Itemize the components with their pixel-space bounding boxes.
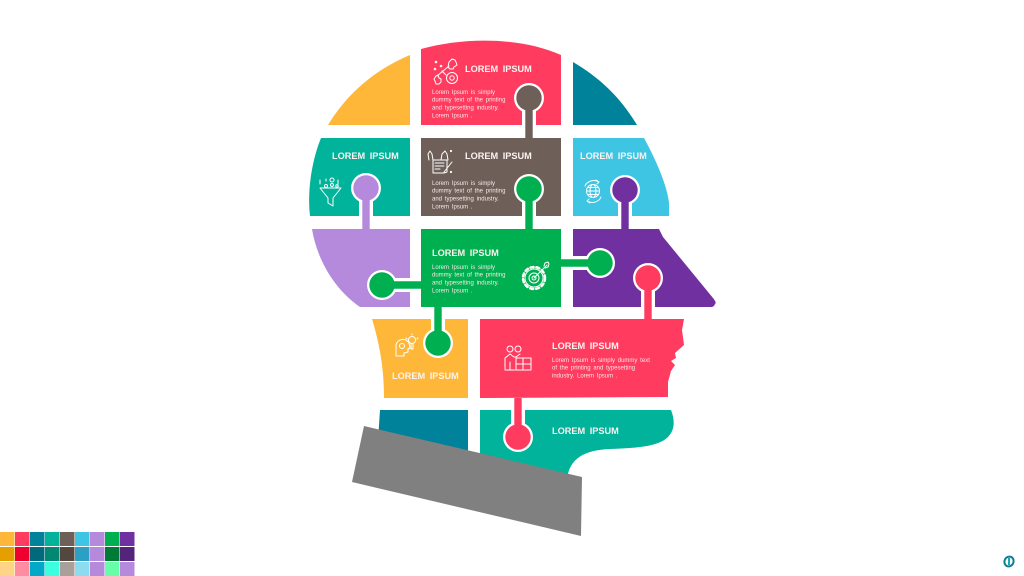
panel: top left yellow (328, 55, 410, 125)
text block: and typesetting industry. (432, 106, 499, 112)
heading: LOREM IPSUM (332, 151, 399, 161)
icon: key and gear (434, 59, 458, 84)
panel: neck green-teal (480, 410, 674, 480)
colour palette (0, 532, 134, 576)
panel: top pink (421, 41, 561, 125)
heading: LOREM IPSUM (465, 64, 532, 74)
connector: dark purple (610, 175, 640, 229)
panel: neck teal blue (376, 410, 468, 470)
panel: right purple (573, 229, 716, 307)
icon: globe (585, 180, 601, 203)
connector: light purple (351, 173, 381, 229)
icon: people with puzzle (505, 346, 531, 370)
text block: Lorem Ipsum is simply (432, 181, 495, 187)
text block (432, 90, 505, 120)
connector: green down (423, 307, 453, 358)
text block: and typesetting industry. (432, 196, 499, 202)
text block (552, 358, 650, 380)
icon: logo (1003, 555, 1015, 568)
text block: Lorem Ipsum is simply (432, 265, 495, 271)
text block: Lorem Ipsum is simply dummy text (552, 358, 650, 364)
text block: and typesetting industry. (432, 280, 499, 286)
text block: dummy text of the printing (432, 188, 505, 194)
text block: of the printing and typesetting (552, 366, 635, 372)
connector: pink down (503, 398, 533, 452)
heading: LOREM IPSUM (580, 151, 647, 161)
panel: right light blue (573, 138, 669, 216)
heading: LOREM IPSUM (432, 248, 499, 258)
text block: dummy text of the printing (432, 272, 505, 278)
connector: green top (514, 174, 544, 229)
connector: green left (367, 270, 421, 300)
text block: Lorem Ipsum . (432, 114, 473, 120)
connector: brown (514, 83, 544, 138)
heading: LOREM IPSUM (552, 426, 619, 436)
icon: gear with target (523, 262, 549, 289)
text block: dummy text of the printing (432, 98, 505, 104)
icon: checklist (428, 150, 452, 173)
text block: Lorem Ipsum . (432, 204, 473, 210)
panel: lower pink (480, 319, 684, 398)
panel: left green-teal (309, 138, 410, 216)
text block (432, 181, 505, 210)
icon: head with bulb (396, 334, 418, 356)
heading: LOREM IPSUM (465, 151, 532, 161)
connector: pink up (633, 263, 663, 319)
text block: Lorem Ipsum . (432, 288, 473, 294)
text block (432, 265, 505, 294)
panel: top right teal (573, 62, 637, 125)
icon: funnel (320, 178, 341, 206)
panel: left light purple (312, 229, 410, 307)
panel: lower yellow (372, 319, 468, 398)
panel: centre brown (421, 138, 561, 216)
text block: Lorem Ipsum is simply (432, 90, 495, 96)
heading: LOREM IPSUM (392, 371, 459, 381)
grey block (352, 426, 582, 536)
connector: green right (561, 248, 615, 278)
heading: LOREM IPSUM (552, 341, 619, 351)
text block: industry. Lorem Ipsum . (552, 374, 618, 380)
panel: centre green (421, 229, 561, 307)
